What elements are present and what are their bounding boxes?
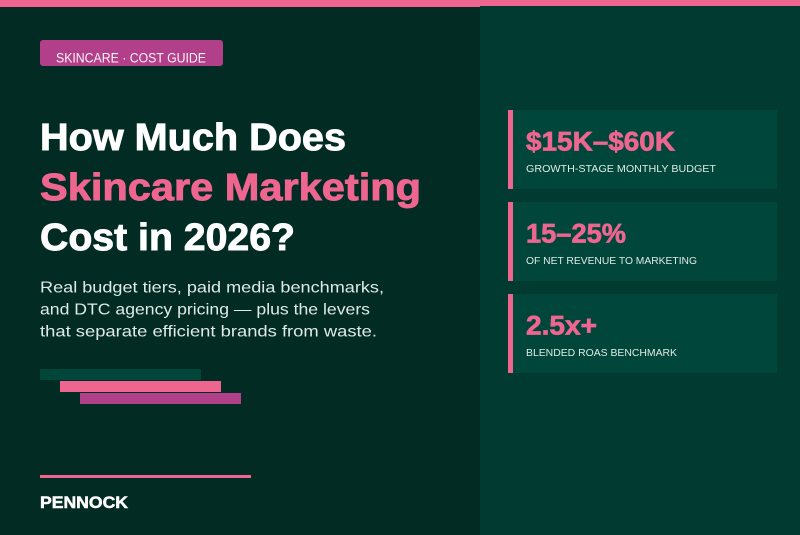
brand footer: PENNOCK — [40, 494, 128, 512]
tag: category label — [40, 40, 223, 66]
intro text — [40, 280, 384, 340]
top accent bar — [0, 0, 800, 7]
decorative stacked bars — [40, 369, 241, 404]
stat card: net revenue: OF NET REVENUE TO MARKETING — [526, 256, 697, 267]
stat card: monthly budget: $15K–$60K — [526, 126, 676, 156]
stat card: monthly budget: GROWTH-STAGE MONTHLY BUDGET — [526, 164, 716, 175]
stat card: net revenue — [508, 202, 777, 281]
title — [40, 117, 421, 259]
title: How Much Does — [40, 117, 346, 159]
stat card: ROAS: BLENDED ROAS BENCHMARK — [526, 348, 677, 359]
panel: left background — [0, 0, 480, 535]
stat card: ROAS: 2.5x+ — [526, 310, 597, 340]
intro text: that separate efficient brands from waste. — [40, 324, 377, 340]
brand footer — [40, 475, 251, 512]
stat card: ROAS — [508, 294, 777, 373]
title: Skincare Marketing — [40, 167, 421, 209]
stat card: net revenue: 15–25% — [526, 218, 626, 248]
stat card: monthly budget — [508, 110, 777, 189]
panel: right background — [480, 0, 800, 535]
tag: category label: SKINCARE · COST GUIDE — [56, 50, 206, 66]
intro text: and DTC agency pricing — plus the levers — [40, 302, 370, 318]
title: Cost in 2026? — [40, 217, 295, 259]
intro text: Real budget tiers, paid media benchmarks, — [40, 280, 384, 296]
